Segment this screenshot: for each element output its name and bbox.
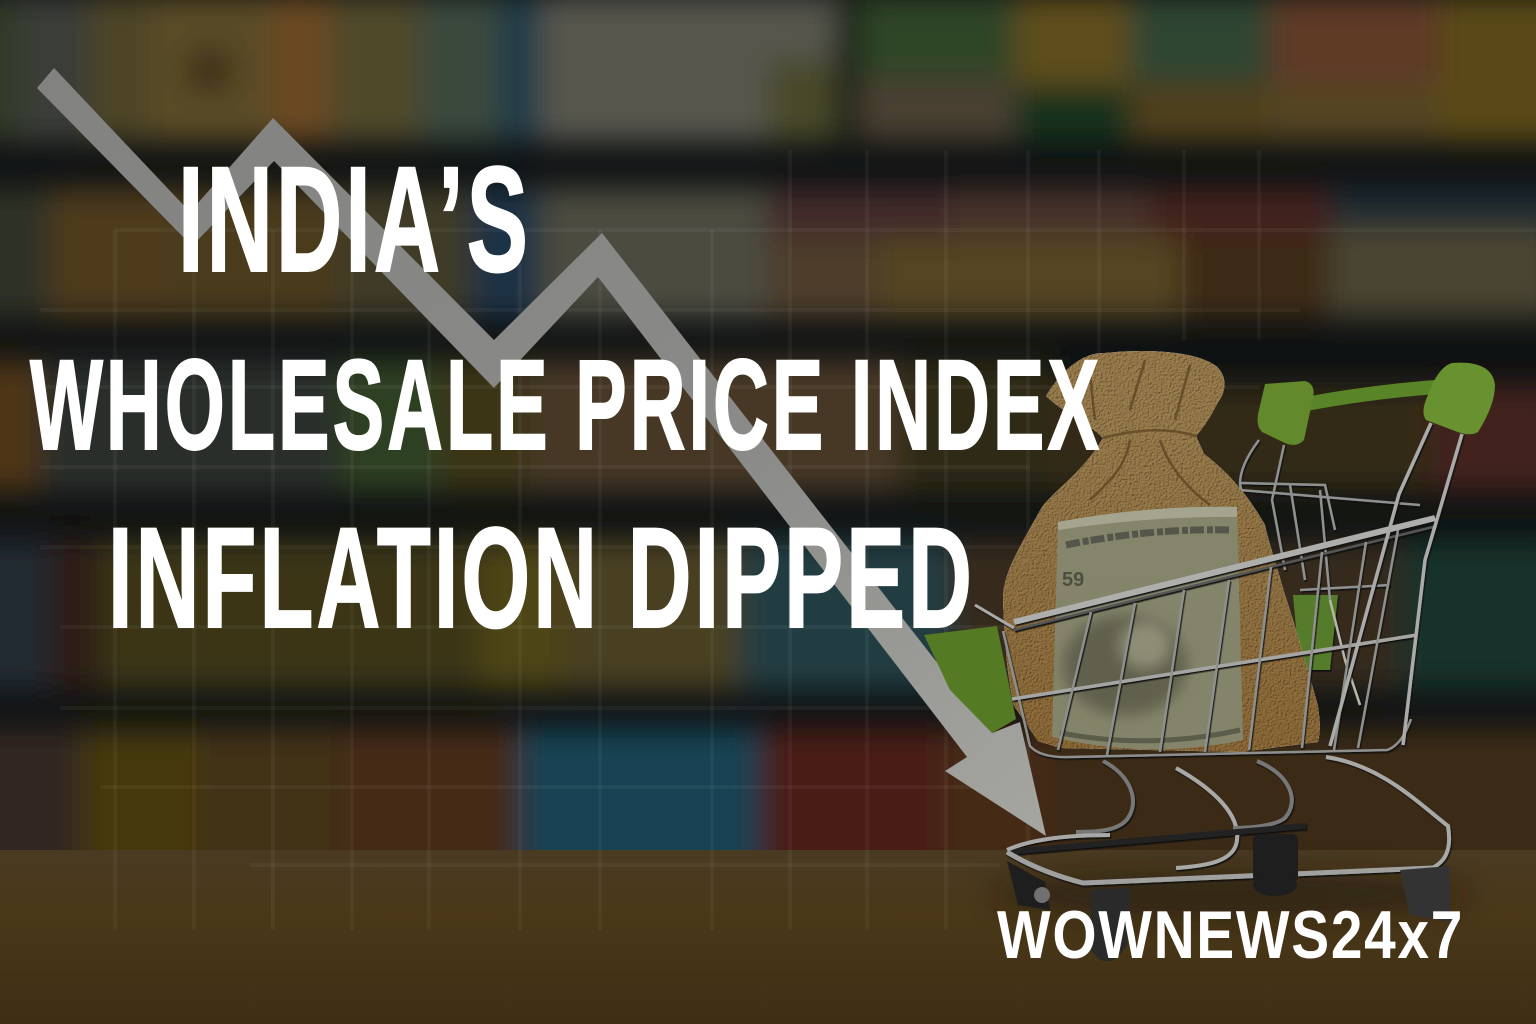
- cart: money bag: [1003, 429, 1320, 752]
- wooden table top: [0, 850, 1536, 1024]
- cart: rolled banknotes: 59: [1062, 569, 1084, 591]
- title: [30, 135, 1102, 658]
- shopping cart with money bag: [924, 351, 1495, 961]
- falling trend arrow: [37, 68, 1046, 836]
- cart: undercarriage legs and base frame: [1007, 757, 1449, 883]
- cart: table shadow: [990, 873, 1470, 917]
- chart grid overlay: [40, 150, 1536, 930]
- title line 1: INDIA’S: [178, 135, 531, 303]
- cart: green crate: [924, 626, 1016, 733]
- cart: right handle grip: [1423, 363, 1495, 434]
- cart: wheels: [1007, 834, 1450, 961]
- cart: bag tie folds: [1090, 360, 1210, 505]
- cart: rolled banknotes: [1052, 507, 1243, 749]
- cart: basket wires: [975, 423, 1462, 757]
- cart: back basket and green panel: [1240, 440, 1420, 705]
- cart: left handle grip: [1258, 381, 1314, 445]
- cart: bag neck and ruffle: [1046, 351, 1224, 438]
- cart: green handle bar: [1306, 387, 1436, 404]
- title line 3: INFLATION DIPPED: [108, 499, 975, 658]
